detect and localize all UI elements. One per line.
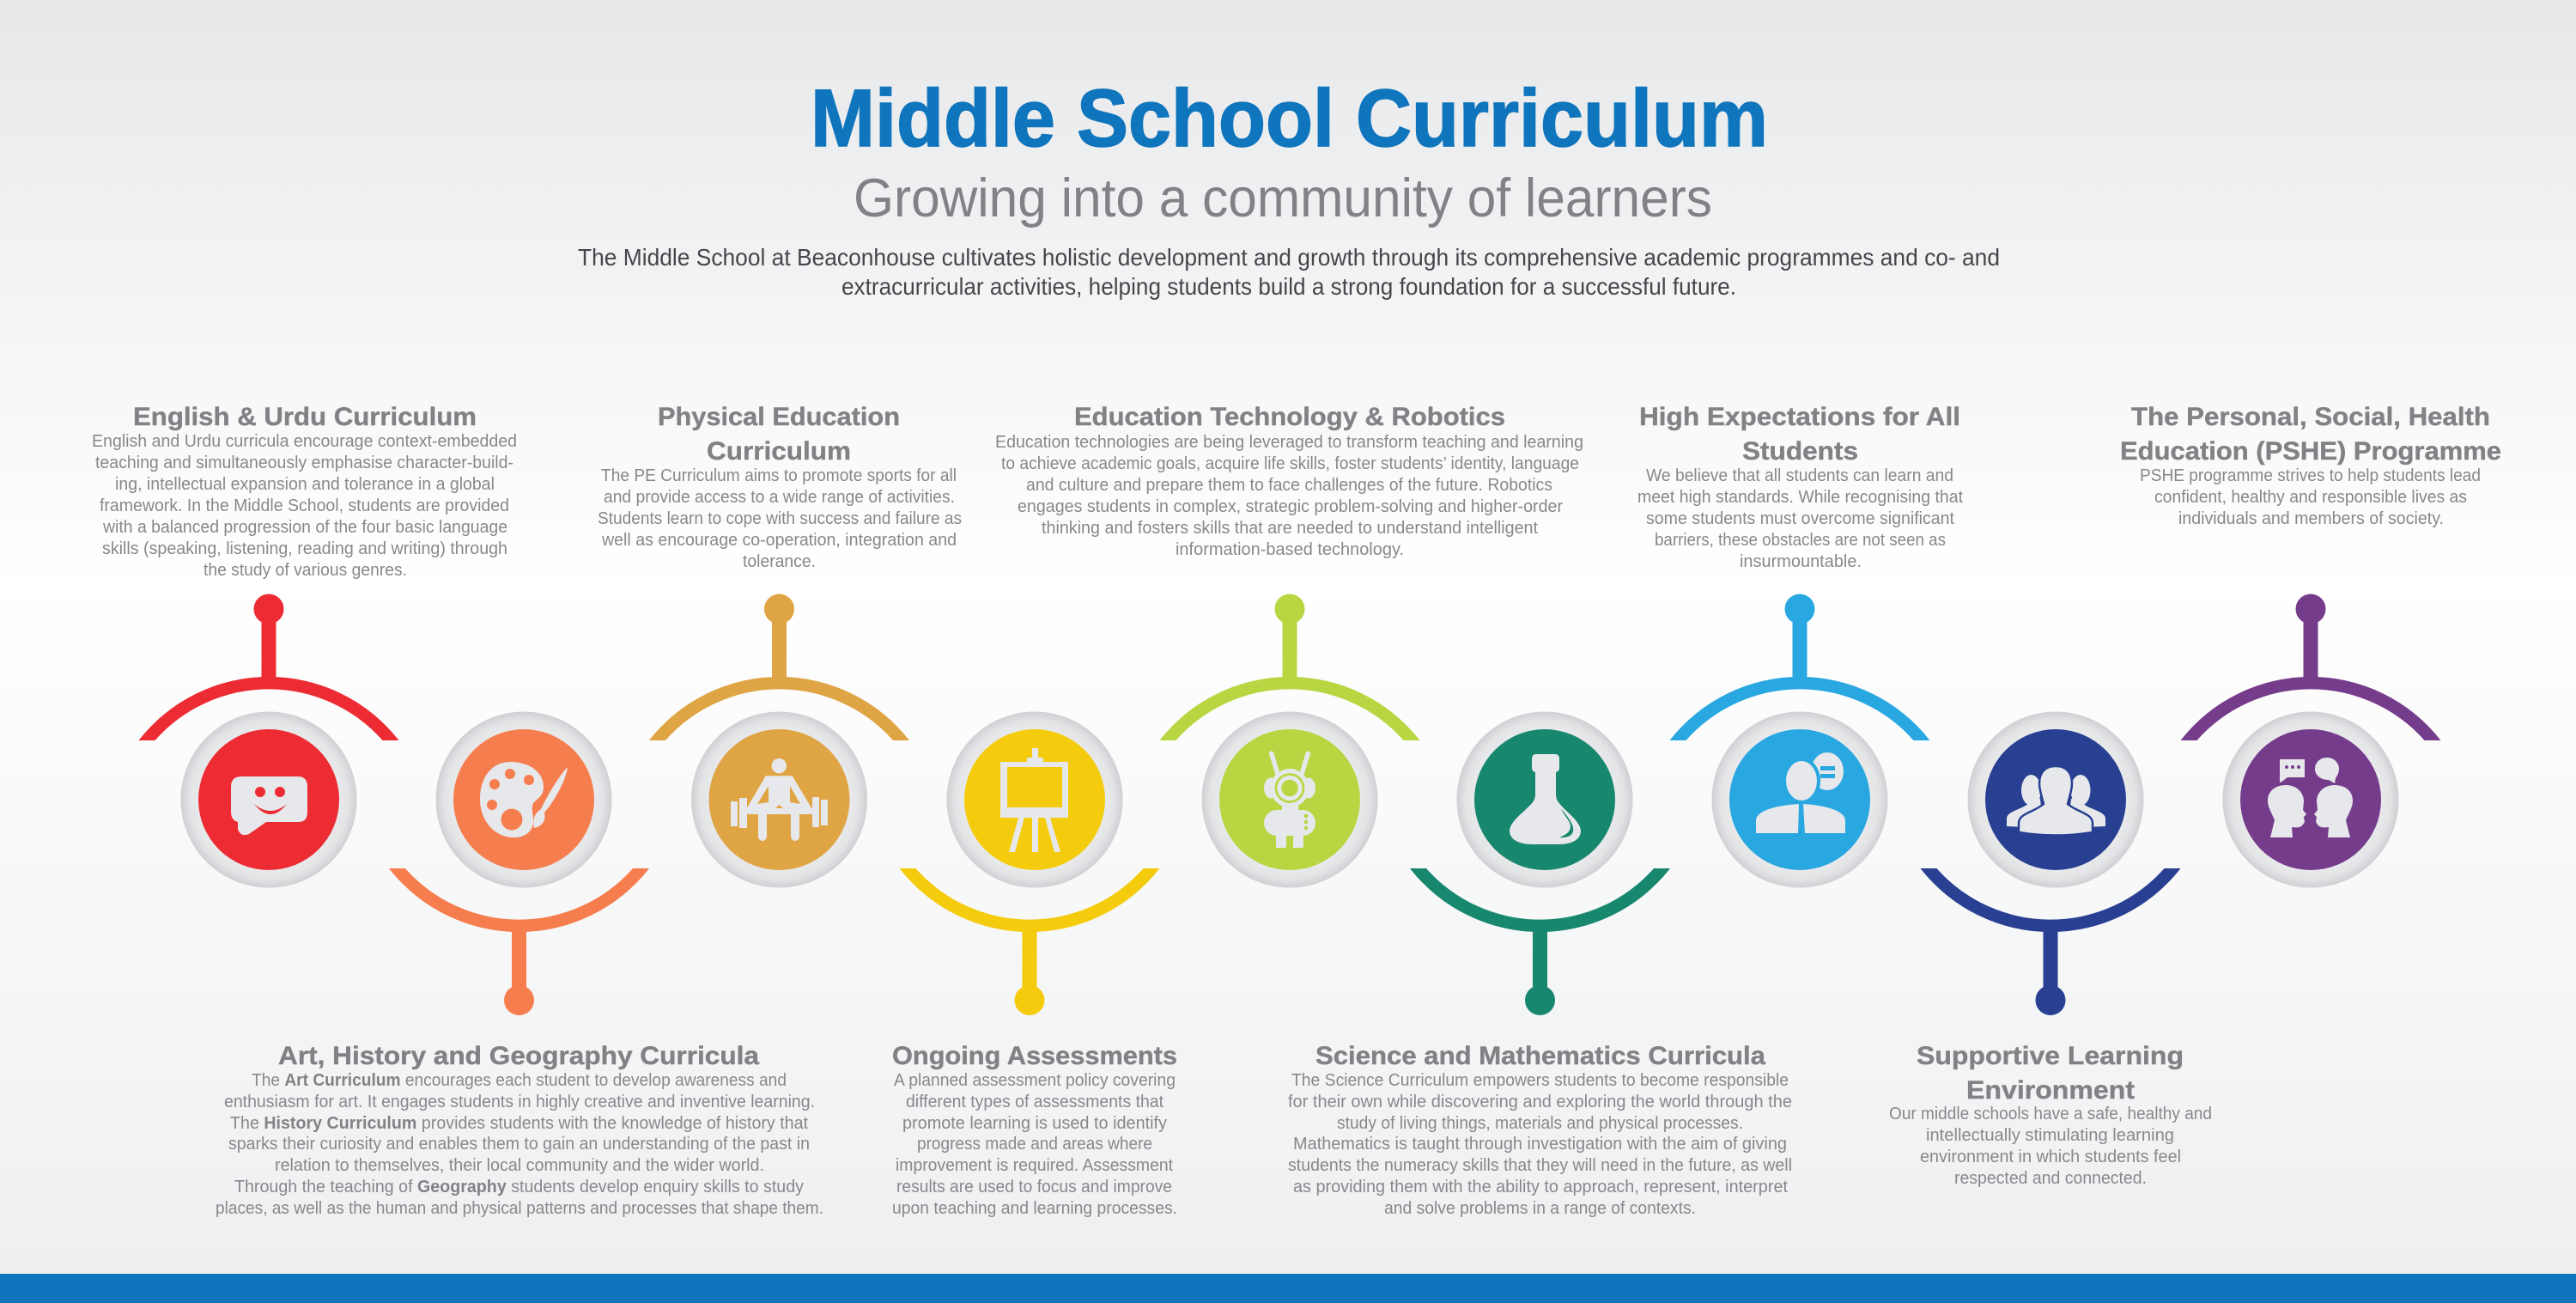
text: Education Technology & Robotics: and culture and prepare them to face challenges of the future. Robotics [1026, 476, 1552, 495]
text: English & Urdu: with a balanced progression of the four basic language [102, 518, 507, 537]
text: Physical Education: Students learn to cope with success and failure as [598, 509, 962, 528]
icon: person with speech bubble [1712, 711, 1887, 888]
heading: Supportive Learning Environment: Supportive Learning [1917, 1042, 2184, 1070]
icon: flask [1456, 711, 1633, 888]
text: High Expectations: insurmountable. [1740, 552, 1862, 571]
text: Ongoing Assessments: upon teaching and learning processes. [892, 1199, 1177, 1218]
heading: Supportive Learning Environment [1917, 1042, 2184, 1105]
panel: Physical Education [598, 403, 962, 888]
icon: palette and brush [436, 711, 611, 888]
heading: PSHE Programme [2120, 403, 2501, 466]
text: Science and Mathematics: as providing them with the ability to approach, represent, interpret [1293, 1178, 1788, 1196]
text: Education Technology & Robotics: information-based technology. [1176, 540, 1404, 559]
icon: robot [1202, 711, 1377, 888]
heading: Ongoing Assessments: Ongoing Assessments [892, 1042, 1177, 1070]
panel: PSHE Programme [2120, 403, 2501, 888]
text: Education Technology & Robotics: to achieve academic goals, acquire life skills, foster students’ identity, language [1001, 454, 1579, 473]
text: Education Technology & Robotics [995, 433, 1583, 559]
connector: yellow arc [900, 868, 1159, 1015]
text: Art, History and Geography: sparks their curiosity and enables them to gain an understanding of the past in [228, 1135, 810, 1154]
text: English & Urdu: teaching and simultaneously emphasise character-build- [95, 454, 513, 472]
heading: English & Urdu: English & Urdu Curriculum [133, 403, 477, 431]
text: Science and Mathematics: for their own while discovering and exploring the world through the [1288, 1093, 1792, 1111]
heading: High Expectations: High Expectations for All [1639, 403, 1960, 431]
text: Education Technology & Robotics: Education technologies are being leveraged to transform teaching and learning [995, 433, 1583, 452]
subtitle: Growing into a community of learners [854, 168, 1712, 228]
text: English & Urdu: English and Urdu curricula encourage context-embedded [92, 432, 517, 451]
text: Physical Education: and provide access to a wide range of activities. [604, 488, 955, 507]
text: Ongoing Assessments: improvement is required. Assessment [896, 1156, 1173, 1175]
connector: green arc [1410, 868, 1670, 1015]
text: Physical Education: tolerance. [743, 552, 816, 571]
icon: easel [946, 711, 1123, 888]
text: Ongoing Assessments: A planned assessment policy covering [894, 1071, 1176, 1090]
text: Art, History and Geography: enthusiasm for art. It engages students in highly creative and inventive learning. [224, 1093, 815, 1111]
heading: Science and Mathematics: Science and Mathematics Curricula [1315, 1042, 1765, 1070]
heading: Physical Education: Curriculum [707, 437, 851, 466]
text: Ongoing Assessments: results are used to focus and improve [896, 1178, 1172, 1196]
text: English & Urdu: skills (speaking, listening, reading and writing) through [102, 539, 507, 558]
text: Supportive Learning Environment [1889, 1105, 2212, 1188]
panel: English & Urdu Curriculum [92, 403, 517, 888]
text: Ongoing Assessments: progress made and areas where [917, 1135, 1152, 1154]
text: Art, History and Geography: relation to themselves, their local community and the wider world. [275, 1156, 764, 1175]
intro text: The Middle School at Beaconhouse cultivates holistic development and growth through its comprehensive academic programmes and co- and [578, 244, 2000, 271]
text: Science and Mathematics: and solve problems in a range of contexts. [1384, 1199, 1696, 1218]
text: Ongoing Assessments: promote learning is used to identify [902, 1114, 1167, 1133]
text: Supportive Learning Environment: environment in which students feel [1920, 1148, 2181, 1166]
text: PSHE Programme: confident, healthy and responsible lives as [2154, 488, 2467, 507]
icon: chat smile [180, 711, 357, 888]
text: Education Technology & Robotics: engages students in complex, strategic problem-solving and higher-order [1018, 497, 1563, 516]
text: Physical Education: well as encourage co-operation, integration and [601, 531, 957, 550]
heading: Physical Education: Physical Education [658, 403, 900, 431]
panel: Education Technology & Robotics [995, 403, 1583, 888]
panel: Art, History and Geography [216, 711, 823, 1218]
text: Art, History and Geography: Through the teaching of Geography students develop enquiry skills to study [234, 1178, 804, 1196]
heading: High Expectations: Students [1742, 437, 1858, 466]
text: Physical Education: The PE Curriculum aims to promote sports for all [601, 466, 957, 485]
panel: Science and Mathematics [1288, 711, 1792, 1218]
text: High Expectations: meet high standards. While recognising that [1637, 488, 1963, 507]
icon: group of people [1968, 711, 2143, 888]
icon: two heads talking [2222, 711, 2399, 888]
panel: High Expectations [1637, 403, 1963, 888]
icon: weightlifter [691, 711, 867, 888]
connector: orange arc [389, 868, 649, 1015]
heading: PSHE Programme: The Personal, Social, Health [2131, 403, 2490, 431]
text: High Expectations: some students must overcome significant [1646, 509, 1954, 528]
intro text: extracurricular activities, helping students build a strong foundation for a successful future. [841, 273, 1736, 300]
panel: Supportive Learning Environment [1889, 711, 2212, 1188]
text: Supportive Learning Environment: respected and connected. [1954, 1169, 2147, 1188]
text: Art, History and Geography [216, 1071, 823, 1218]
text: Science and Mathematics: The Science Curriculum empowers students to become responsible [1291, 1071, 1789, 1090]
text: High Expectations: barriers, these obstacles are not seen as [1655, 531, 1946, 550]
panel: Ongoing Assessments [892, 711, 1177, 1218]
connector: lime arc [1159, 594, 1420, 740]
text: Ongoing Assessments: different types of assessments that [906, 1093, 1163, 1111]
text: English & Urdu: ing, intellectual expansion and tolerance in a global [115, 475, 495, 494]
connector: purple arc [2181, 594, 2440, 740]
text: PSHE Programme: individuals and members of society. [2178, 509, 2444, 528]
heading: Education Technology & Robotics: Education Technology & Robotics [1074, 403, 1505, 431]
connector: red arc [139, 594, 398, 740]
intro text [578, 244, 2000, 300]
text: Physical Education [598, 466, 962, 571]
text: Supportive Learning Environment: intellectually stimulating learning [1926, 1126, 2174, 1145]
text: High Expectations: We believe that all students can learn and [1646, 466, 1953, 485]
text: PSHE Programme: PSHE programme strives to help students lead [2140, 466, 2481, 485]
text: Science and Mathematics: study of living things, materials and physical processes. [1337, 1114, 1743, 1133]
text: English & Urdu [92, 432, 517, 580]
footer bar [0, 1274, 2576, 1303]
heading: High Expectations [1639, 403, 1960, 466]
connector: navy arc [1920, 868, 2181, 1015]
text: Ongoing Assessments [892, 1071, 1177, 1218]
text: Education Technology & Robotics: thinking and fosters skills that are needed to understand intelligent [1042, 519, 1538, 538]
text: Art, History and Geography: The History Curriculum provides students with the knowledge of history that [230, 1114, 808, 1133]
text: Art, History and Geography: The Art Curriculum encourages each student to develop awareness and [252, 1071, 787, 1090]
text: Science and Mathematics: students the numeracy skills that they will need in the future, as well [1288, 1156, 1792, 1175]
connector: gold arc [649, 594, 909, 740]
heading: Supportive Learning Environment: Environment [1966, 1076, 2135, 1105]
heading: Art, History and Geography: Art, History and Geography Curricula [278, 1042, 759, 1070]
connector: blue arc [1669, 594, 1930, 740]
text: Science and Mathematics: Mathematics is taught through investigation with the aim of giving [1293, 1135, 1787, 1154]
heading: Physical Education [658, 403, 900, 466]
text: Art, History and Geography: places, as well as the human and physical patterns and processes that shape them. [216, 1199, 823, 1218]
text: English & Urdu: the study of various genres. [204, 561, 407, 580]
title: Middle School Curriculum [811, 73, 1768, 164]
text: Science and Mathematics [1288, 1071, 1792, 1218]
text: English & Urdu: framework. In the Middle School, students are provided [100, 496, 509, 515]
text: Supportive Learning Environment: Our middle schools have a safe, healthy and [1889, 1105, 2212, 1123]
text: PSHE Programme [2140, 466, 2481, 528]
heading: PSHE Programme: Education (PSHE) Programme [2120, 437, 2501, 466]
text: High Expectations [1637, 466, 1963, 571]
